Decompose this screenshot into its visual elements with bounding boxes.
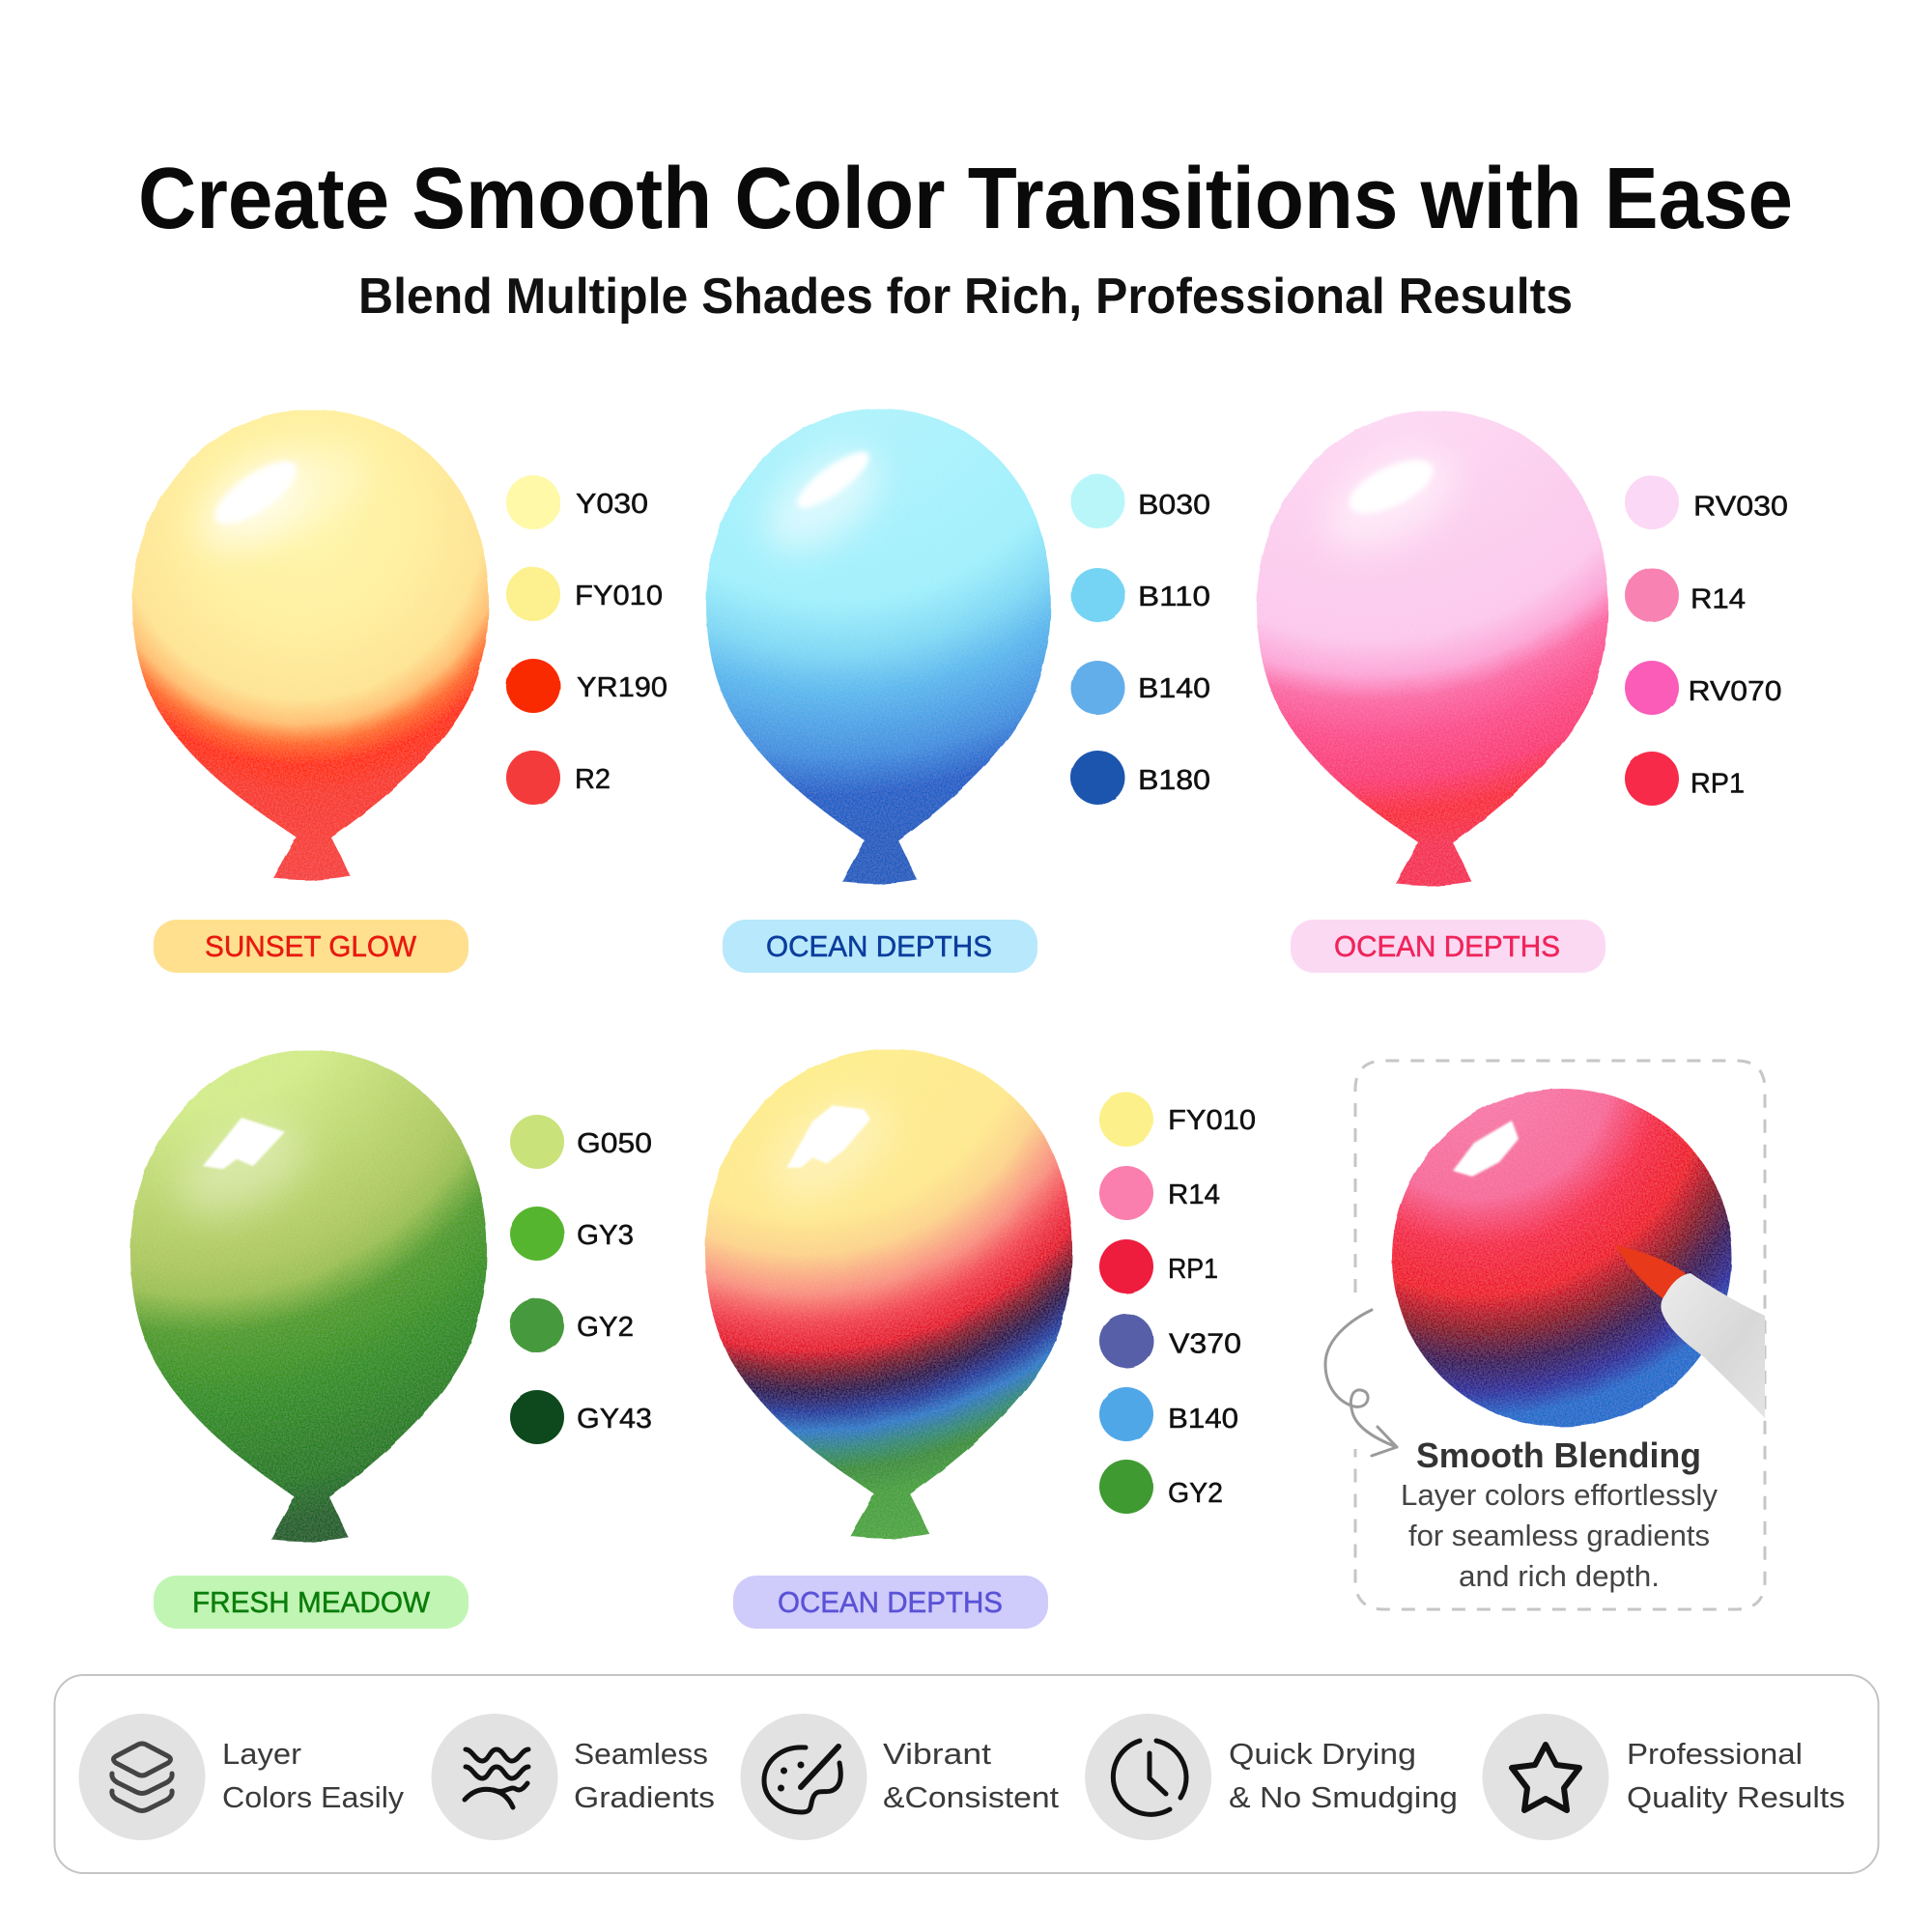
labels: fresh meadow: GY3 bbox=[577, 1220, 634, 1251]
pill: fresh meadow bbox=[154, 1576, 469, 1629]
feature: layer colors: Colors Easily bbox=[222, 1780, 405, 1814]
swatches: ocean depths pink bbox=[1625, 475, 1679, 806]
callout body bbox=[1401, 1478, 1719, 1593]
feature: seamless gradients bbox=[431, 1714, 715, 1840]
icon: star bbox=[1512, 1745, 1579, 1810]
labels: ocean depths blue bbox=[1138, 490, 1210, 796]
labels: ocean depths blue: B140 bbox=[1138, 673, 1210, 704]
labels: fresh meadow bbox=[577, 1128, 652, 1435]
labels: ocean depths rainbow: FY010 bbox=[1168, 1105, 1256, 1136]
feature: vibrant consistent bbox=[740, 1714, 1059, 1840]
swatches: sunset glow bbox=[506, 475, 560, 805]
feature: seamless gradients: Gradients bbox=[574, 1780, 715, 1814]
icon: waves bbox=[465, 1749, 528, 1807]
feature: quick drying: & No Smudging bbox=[1229, 1780, 1458, 1814]
callout body: for seamless gradients bbox=[1408, 1519, 1710, 1552]
swatches: ocean depths blue bbox=[1070, 474, 1124, 805]
feature: professional quality: Quality Results bbox=[1627, 1780, 1845, 1814]
icon: clock bbox=[1113, 1741, 1186, 1814]
labels: ocean depths blue: B030 bbox=[1138, 490, 1210, 521]
labels: ocean depths rainbow: R14 bbox=[1168, 1179, 1220, 1210]
dashed border bbox=[1355, 1061, 1765, 1609]
panel: ocean depths rainbow bbox=[705, 1049, 1256, 1629]
pill: ocean depths rainbow: OCEAN DEPTHS bbox=[778, 1585, 1003, 1619]
subtitle: Blend Multiple Shades for Rich, Professional Results bbox=[358, 269, 1573, 325]
labels: ocean depths pink: RP1 bbox=[1690, 769, 1745, 800]
pill: fresh meadow: FRESH MEADOW bbox=[192, 1585, 431, 1619]
labels: ocean depths rainbow: RP1 bbox=[1168, 1254, 1218, 1285]
panel: ocean depths blue bbox=[706, 409, 1210, 973]
balloon: ocean depths pink bbox=[1257, 411, 1608, 886]
feature: quick drying: Quick Drying bbox=[1229, 1737, 1416, 1771]
labels: ocean depths rainbow bbox=[1168, 1105, 1256, 1509]
labels: fresh meadow: GY2 bbox=[577, 1312, 634, 1343]
curved arrow bbox=[1325, 1310, 1397, 1456]
labels: ocean depths rainbow: GY2 bbox=[1168, 1478, 1223, 1509]
labels: sunset glow: R2 bbox=[575, 764, 611, 795]
labels: sunset glow: FY010 bbox=[575, 581, 663, 611]
feature: professional quality bbox=[1482, 1714, 1845, 1840]
labels: sunset glow bbox=[575, 489, 668, 795]
swatches: ocean depths rainbow bbox=[1099, 1093, 1153, 1514]
icon: palette bbox=[764, 1747, 840, 1812]
callout body: and rich depth. bbox=[1459, 1559, 1660, 1593]
feature: vibrant consistent: &Consistent bbox=[883, 1780, 1059, 1814]
panel: fresh meadow bbox=[130, 1050, 652, 1629]
feature: layer colors: Layer bbox=[222, 1737, 301, 1771]
pill: ocean depths pink bbox=[1291, 920, 1605, 973]
pill: sunset glow: SUNSET GLOW bbox=[205, 929, 417, 963]
callout body: Layer colors effortlessly bbox=[1401, 1478, 1719, 1512]
labels: ocean depths pink: RV070 bbox=[1689, 676, 1781, 707]
balloon: ocean depths blue bbox=[706, 409, 1051, 884]
pill: ocean depths blue bbox=[723, 920, 1037, 973]
pill: sunset glow bbox=[154, 920, 469, 973]
labels: ocean depths rainbow: B140 bbox=[1168, 1404, 1238, 1435]
swatches: fresh meadow bbox=[510, 1115, 564, 1444]
labels: ocean depths blue: B180 bbox=[1138, 765, 1210, 796]
feature: vibrant consistent: Vibrant bbox=[883, 1737, 991, 1771]
balloon: fresh meadow bbox=[130, 1050, 487, 1542]
feature: seamless gradients: Seamless bbox=[574, 1737, 708, 1771]
pill: ocean depths pink: OCEAN DEPTHS bbox=[1334, 929, 1560, 963]
panel: smooth blending callout bbox=[1325, 1061, 1765, 1609]
labels: ocean depths pink bbox=[1689, 491, 1788, 800]
icon: layers bbox=[112, 1744, 172, 1810]
labels: sunset glow: YR190 bbox=[577, 672, 668, 703]
pill: ocean depths blue: OCEAN DEPTHS bbox=[766, 929, 992, 963]
feature: quick drying bbox=[1085, 1714, 1458, 1840]
labels: fresh meadow: GY43 bbox=[577, 1404, 652, 1435]
marker pen bbox=[1615, 1245, 1765, 1418]
labels: ocean depths pink: RV030 bbox=[1693, 491, 1788, 522]
feature: professional quality: Professional bbox=[1627, 1737, 1803, 1771]
callout heading: Smooth Blending bbox=[1416, 1435, 1701, 1475]
labels: ocean depths pink: R14 bbox=[1690, 583, 1746, 614]
panel: sunset glow bbox=[132, 410, 668, 973]
labels: ocean depths rainbow: V370 bbox=[1169, 1329, 1241, 1360]
balloon: ocean depths rainbow bbox=[705, 1049, 1072, 1539]
feature: layer colors bbox=[79, 1714, 405, 1840]
labels: sunset glow: Y030 bbox=[576, 489, 648, 520]
labels: fresh meadow: G050 bbox=[577, 1128, 652, 1159]
blended color ball bbox=[1392, 1089, 1732, 1427]
labels: ocean depths blue: B110 bbox=[1138, 582, 1210, 612]
panel: feature bar bbox=[54, 1675, 1878, 1873]
title: Create Smooth Color Transitions with Ease bbox=[138, 151, 1793, 247]
balloon: sunset glow bbox=[132, 410, 489, 880]
panel: ocean depths pink bbox=[1257, 411, 1788, 973]
pill: ocean depths rainbow bbox=[733, 1576, 1048, 1629]
